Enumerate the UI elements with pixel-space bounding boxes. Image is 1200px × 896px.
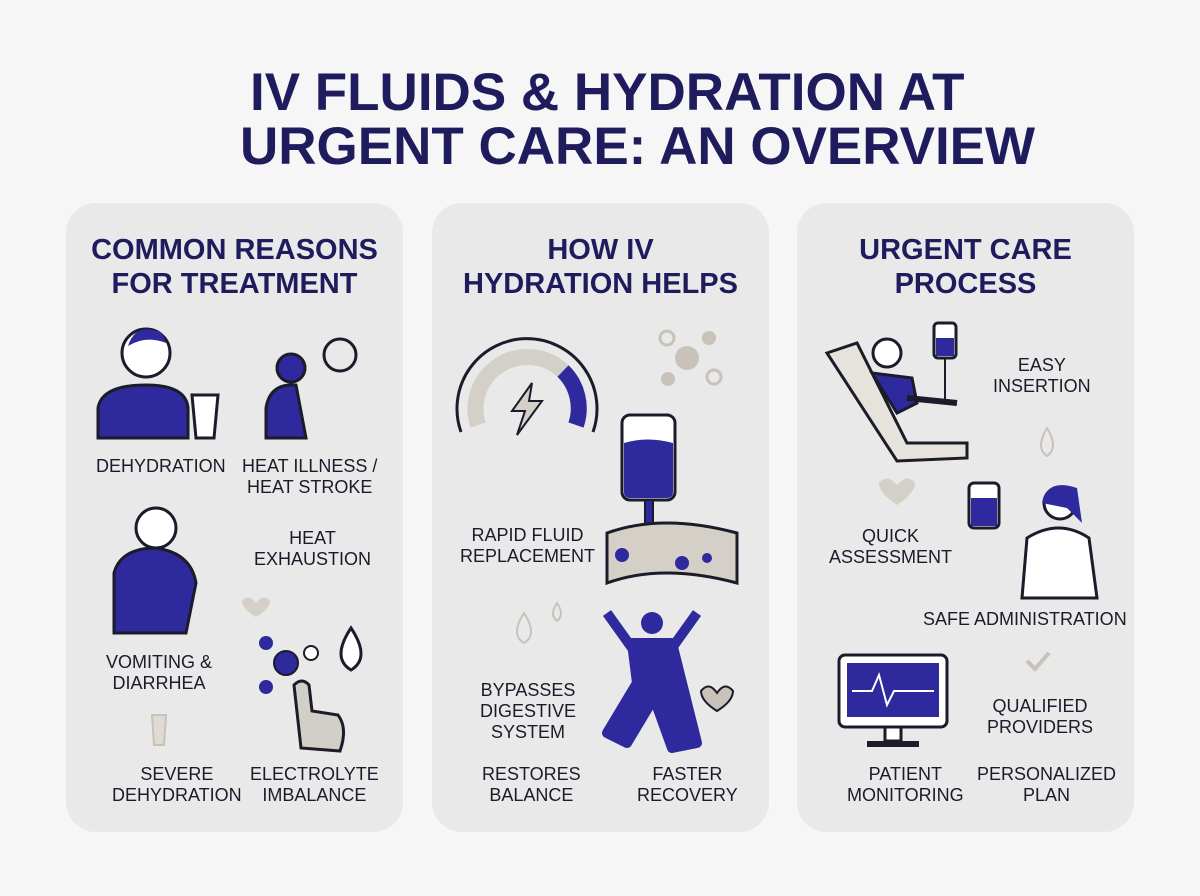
heading: how iv helps [463,234,738,300]
heading: how iv helps: HYDRATION HELPS [463,268,738,300]
panel: common reasons: HEAT [289,528,336,548]
panel: urgent care process [797,203,1134,832]
panel: how iv helps: FASTER [652,764,722,784]
panel: common reasons: DIARRHEA [112,673,206,693]
panel: urgent care process: PERSONALIZED [977,764,1116,784]
labels: process [993,355,1091,396]
panel: urgent care process: ASSESSMENT [829,547,952,567]
panel: how iv helps: BYPASSES [481,680,575,700]
panel: how iv helps: BALANCE [489,785,573,805]
labels: helps: REPLACEMENT [460,546,595,566]
heading: common reasons [91,234,378,300]
icons: reasons [96,328,362,753]
labels: helps [460,525,595,566]
panel: urgent care process: MONITORING [847,785,964,805]
panel: common reasons: ELECTROLYTE [250,764,379,784]
labels: reasons: DEHYDRATION [96,456,226,476]
panel: urgent care process: PATIENT [869,764,942,784]
panel: urgent care process: QUICK [862,526,919,546]
labels: helps: RAPID FLUID [472,525,584,545]
heading: process: PROCESS [895,268,1036,300]
heading: process [859,234,1072,300]
labels: process: EASY [1018,355,1066,375]
panel: how iv helps: DIGESTIVE [480,701,576,721]
panel: how iv helps: SYSTEM [491,722,565,742]
panel: how iv helps: RESTORES [482,764,581,784]
heading: how iv helps: HOW IV [547,234,654,266]
labels: process: INSERTION [993,376,1091,396]
panel: urgent care process: PLAN [1023,785,1070,805]
panel: common reasons [66,203,403,832]
icons: process [824,322,1099,747]
panel: urgent care process: SAFE ADMINISTRATION [923,609,1127,629]
panel: how iv helps: RECOVERY [637,785,738,805]
panel: how iv helps [432,203,769,832]
heading: common reasons: COMMON REASONS [91,234,378,266]
panel: urgent care process: QUALIFIED [992,696,1088,716]
panel: common reasons: VOMITING & [106,652,212,672]
heading: process: URGENT CARE [859,234,1072,266]
title: IV FLUIDS & HYDRATION AT [250,63,964,122]
title: URGENT CARE: AN OVERVIEW [240,117,1035,176]
panel: common reasons: DEHYDRATION [112,785,242,805]
panel: common reasons: HEAT ILLNESS / [242,456,377,476]
panel: common reasons: EXHAUSTION [254,549,371,569]
icons: helps [456,330,738,753]
panel: common reasons: SEVERE [140,764,213,784]
panel: common reasons: IMBALANCE [262,785,366,805]
title [240,63,1035,176]
panel: common reasons: HEAT STROKE [247,477,372,497]
panel: urgent care process: PROVIDERS [987,717,1093,737]
heading: common reasons: FOR TREATMENT [112,268,357,300]
